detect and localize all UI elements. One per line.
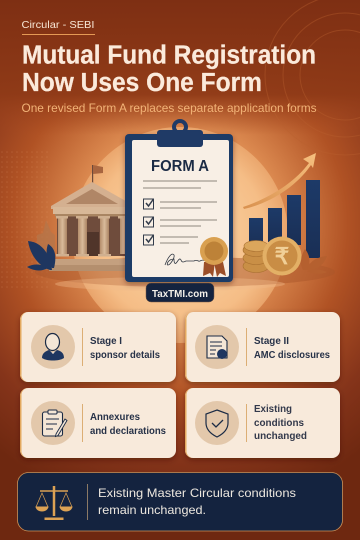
icon: rupee coin: ₹ xyxy=(275,243,290,269)
card text: Annexures xyxy=(90,412,141,423)
icon: leaves left xyxy=(27,241,55,271)
icon: person xyxy=(31,325,75,369)
eyebrow: Circular - SEBI: Circular - SEBI xyxy=(22,19,94,31)
chart: growth bars xyxy=(249,180,320,258)
checkboxes xyxy=(144,199,154,245)
title xyxy=(22,42,316,97)
card: Stage I sponsor details xyxy=(20,312,176,382)
card text xyxy=(90,336,161,361)
card: Stage II AMC disclosures xyxy=(185,312,340,382)
subtitle: One revised Form A replaces separate application forms xyxy=(22,101,316,115)
icon: document with chart xyxy=(195,325,239,369)
title: Now Uses One Form xyxy=(22,69,262,97)
card text: Stage I xyxy=(90,336,122,347)
callout: master circular xyxy=(18,472,342,531)
card text xyxy=(254,336,331,361)
illustration glow xyxy=(72,127,288,343)
seal with ribbon xyxy=(200,237,228,277)
callout text: Existing Master Circular conditions xyxy=(98,486,296,500)
card text: AMC disclosures xyxy=(254,350,331,361)
card text: Stage II xyxy=(254,336,289,347)
card: Annexures and declarations xyxy=(20,388,176,458)
icon: shield check xyxy=(195,401,239,445)
icon: orange leaves xyxy=(301,249,327,274)
icon: scales of justice xyxy=(36,486,72,520)
form heading: FORM A xyxy=(151,158,209,175)
clipboard: Form A xyxy=(125,121,233,282)
ground ellipse xyxy=(35,257,335,291)
card text: and declarations xyxy=(90,426,167,437)
icon: bank building xyxy=(37,165,133,271)
logo pill: TaxTMI.com: TaxTMI.com xyxy=(152,288,208,300)
icon: rupee coin xyxy=(262,236,302,276)
card text xyxy=(254,404,307,442)
card text xyxy=(90,412,167,437)
callout text: remain unchanged. xyxy=(98,503,206,517)
icon: coin stack xyxy=(243,240,269,272)
form lines xyxy=(143,180,217,244)
card text: conditions xyxy=(254,418,305,429)
card text: sponsor details xyxy=(90,350,161,361)
signature xyxy=(165,254,206,265)
card text: Existing xyxy=(254,404,292,415)
card: Existing conditions unchanged xyxy=(185,388,340,458)
callout text xyxy=(98,486,296,517)
title: Mutual Fund Registration xyxy=(22,42,316,70)
card text: unchanged xyxy=(254,431,307,442)
clipboard clip xyxy=(157,121,203,147)
logo pill: TaxTMI.com xyxy=(146,283,214,302)
icon: clipboard with pen xyxy=(31,401,75,445)
arrow: rising trend xyxy=(243,153,316,209)
flag xyxy=(92,165,103,183)
